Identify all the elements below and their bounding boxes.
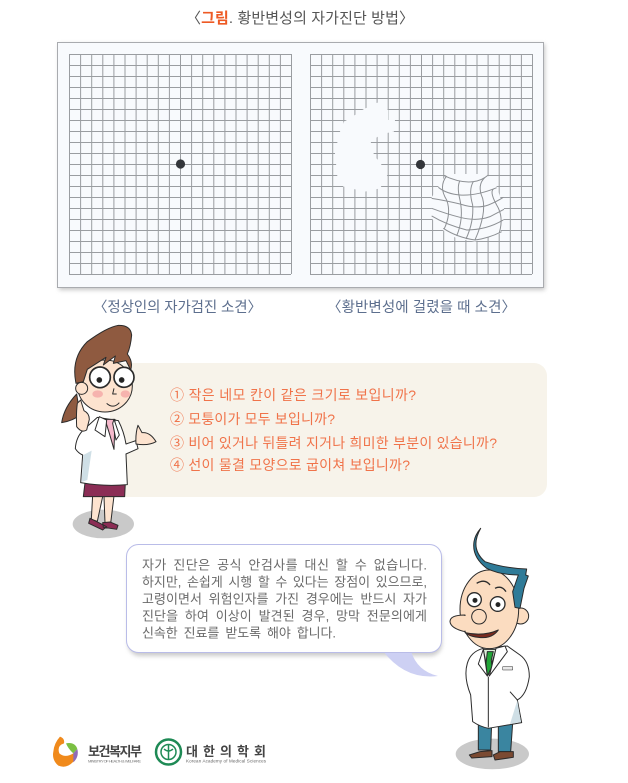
logo: Korean Academy of Medical Sciences: Korean Academy of Medical Sciences	[186, 758, 267, 764]
icon: female doctor	[62, 325, 156, 538]
logo: Ministry of Health & Welfare: 보건복지부	[88, 744, 142, 759]
bubble text: 하지만, 손쉽게 시행 할 수 있다는 장점이 있으므로,	[142, 574, 427, 590]
checklist item 3: ③ 비어 있거나 뒤틀려 지거나 희미한 부분이 있습니까?	[170, 435, 497, 451]
panel: checklist	[110, 363, 547, 497]
bubble text	[142, 558, 427, 640]
checklist item 4: ④ 선이 물결 모양으로 굽이쳐 보입니까?	[170, 457, 410, 473]
bubble text: 자가 진단은 공식 안검사를 대신 할 수 없습니다.	[142, 558, 427, 572]
checklist item 2: ② 모퉁이가 모두 보입니까?	[170, 411, 335, 427]
icon: male doctor	[450, 528, 529, 769]
caption: macular degeneration: 〈황반변성에 걸렸을 때 소견〉	[327, 299, 516, 316]
caption: normal: 〈정상인의 자가검진 소견〉	[93, 299, 262, 316]
logo mark	[53, 737, 78, 767]
chart: macular degeneration grid	[310, 54, 533, 274]
chart: normal grid	[69, 54, 292, 274]
logo: Ministry of Health & Welfare: MINISTRY OF HEALTH & WELFARE	[88, 758, 141, 764]
logo emblem	[156, 740, 181, 764]
bubble text: 진단을 하여 이상이 발견된 경우, 망막 전문의에게	[142, 608, 427, 624]
blank scotoma area	[335, 103, 395, 192]
panel: Amsler grids	[58, 42, 545, 290]
title: 〈그림. 황반변성의 자가진단 방법〉	[186, 10, 414, 27]
bubble text: 고령이면서 위험인자를 가진 경우에는 반드시 자가	[142, 592, 427, 606]
logo: Korean Academy of Medical Sciences	[156, 740, 267, 764]
distorted grid area	[432, 174, 504, 242]
checklist item 1: ① 작은 네모 칸이 같은 크기로 보입니까?	[170, 387, 416, 403]
logo: Korean Academy of Medical Sciences: 대 한 의 학 회	[186, 744, 266, 759]
bubble tail	[383, 651, 438, 676]
speech bubble	[126, 544, 442, 676]
logo: Ministry of Health & Welfare	[53, 737, 142, 767]
bubble text: 신속한 진료를 받도록 해야 합니다.	[142, 626, 336, 640]
